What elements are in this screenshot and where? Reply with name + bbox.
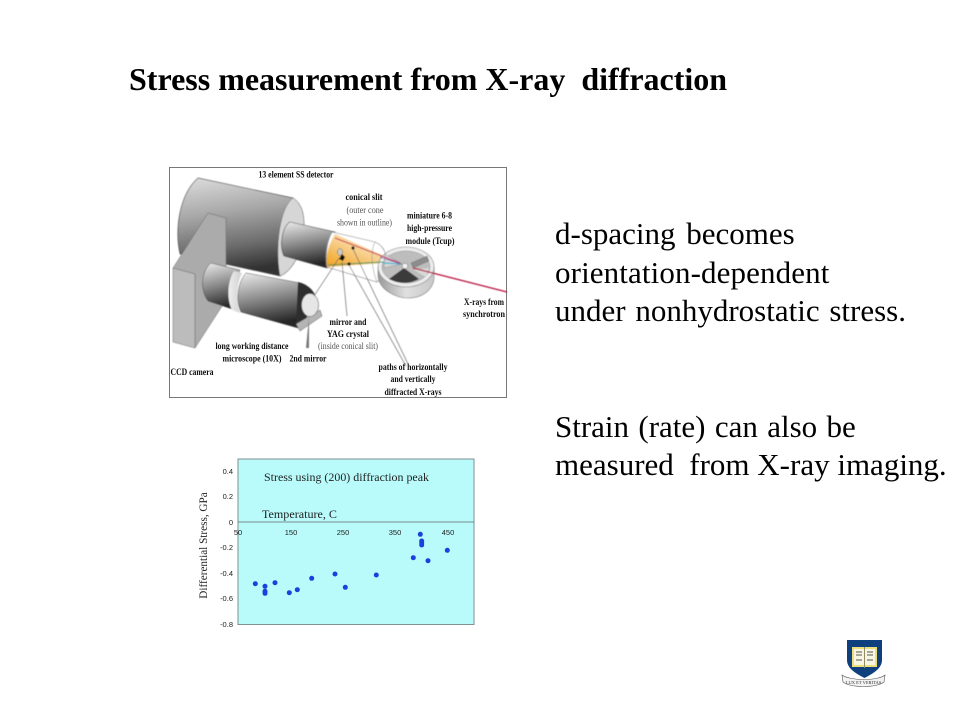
panel: X-ray apparatus diagram: [170, 168, 507, 398]
title: Stress measurement from X-ray diffraction: [129, 61, 727, 97]
icon: conical slit: [326, 232, 400, 282]
x axis ticks: 250: [337, 528, 349, 537]
y axis ticks: 0: [229, 518, 233, 527]
labels: diagram annotations: diffracted X-rays: [384, 388, 442, 398]
labels: diagram annotations: long working distance: [216, 342, 288, 352]
icon: microscope tubes: [203, 263, 316, 328]
y axis ticks: -0.6: [220, 594, 233, 603]
x axis ticks: 350: [389, 528, 401, 537]
y axis ticks: [220, 467, 233, 629]
labels: diagram annotations: paths of horizontally: [378, 363, 448, 373]
arrow: incoming X-ray beam and diffracted paths: [328, 238, 507, 292]
labels: diagram annotations: high-pressure: [407, 224, 452, 234]
y axis label: Differential Stress, GPa: [198, 492, 210, 599]
labels: diagram annotations: conical slit: [346, 193, 383, 203]
icon: mounting plate: [173, 213, 226, 348]
x axis ticks: 450: [442, 528, 454, 537]
text block: d-spacing: [555, 216, 906, 328]
bar chart: differential stress vs temperature scatter: [198, 459, 474, 629]
labels: diagram annotations: miniature 6-8: [407, 212, 452, 222]
y axis ticks: 0.4: [223, 467, 233, 476]
labels: diagram annotations: mirror and: [330, 318, 367, 328]
x axis label: Temperature, C: [262, 507, 337, 521]
crest banner: [842, 675, 885, 686]
labels: diagram annotations: (inside conical slit): [318, 341, 378, 352]
labels: diagram annotations: shown in outline): [337, 218, 392, 228]
labels: diagram annotations: 2nd mirror: [290, 354, 327, 364]
text block: strain: measured from X-ray imaging.: [555, 447, 947, 482]
x axis ticks: [234, 528, 454, 537]
text block: d-spacing: d-spacing becomes: [555, 216, 795, 251]
labels: diagram annotations: [170, 170, 506, 398]
icon: front tube of detector: [282, 222, 335, 268]
text block: strain: Strain (rate) can also be: [555, 409, 856, 444]
text block: d-spacing: orientation-dependent: [555, 255, 830, 290]
icon: second mirror on mount: [296, 294, 322, 348]
y axis ticks: 0.2: [223, 492, 233, 501]
icon: high-pressure module: [378, 247, 434, 298]
labels: diagram annotations: and vertically: [390, 375, 436, 385]
x axis ticks: 50: [234, 528, 242, 537]
chart heading: Stress using (200) diffraction peak: [264, 472, 429, 484]
y axis ticks: -0.4: [220, 569, 233, 578]
y axis ticks: -0.8: [220, 620, 233, 629]
icon: internal mirror marks: [338, 246, 355, 266]
data points: [253, 532, 450, 596]
icon: large detector cylinder: [178, 178, 304, 276]
labels: diagram annotations: microscope (10X): [222, 354, 282, 364]
icon: Yale crest: [842, 640, 885, 686]
text block: d-spacing: under nonhydrostatic stress.: [555, 293, 906, 328]
text block: strain: [555, 409, 947, 482]
labels: diagram annotations: 13 element SS detector: [258, 170, 334, 180]
labels: diagram annotations: (outer cone: [346, 205, 384, 216]
labels: diagram annotations: X-rays from: [464, 298, 504, 308]
labels: diagram annotations: module (Tcup): [406, 236, 454, 247]
labels: diagram annotations: CCD camera: [170, 368, 214, 378]
x axis ticks: 150: [285, 528, 297, 537]
arrows: leader lines: [314, 249, 408, 366]
icon: Yale crest: LUX ET VERITAS: [846, 680, 882, 685]
y axis ticks: -0.2: [220, 543, 233, 552]
labels: diagram annotations: YAG crystal: [327, 330, 369, 340]
labels: diagram annotations: synchrotron: [463, 310, 506, 320]
